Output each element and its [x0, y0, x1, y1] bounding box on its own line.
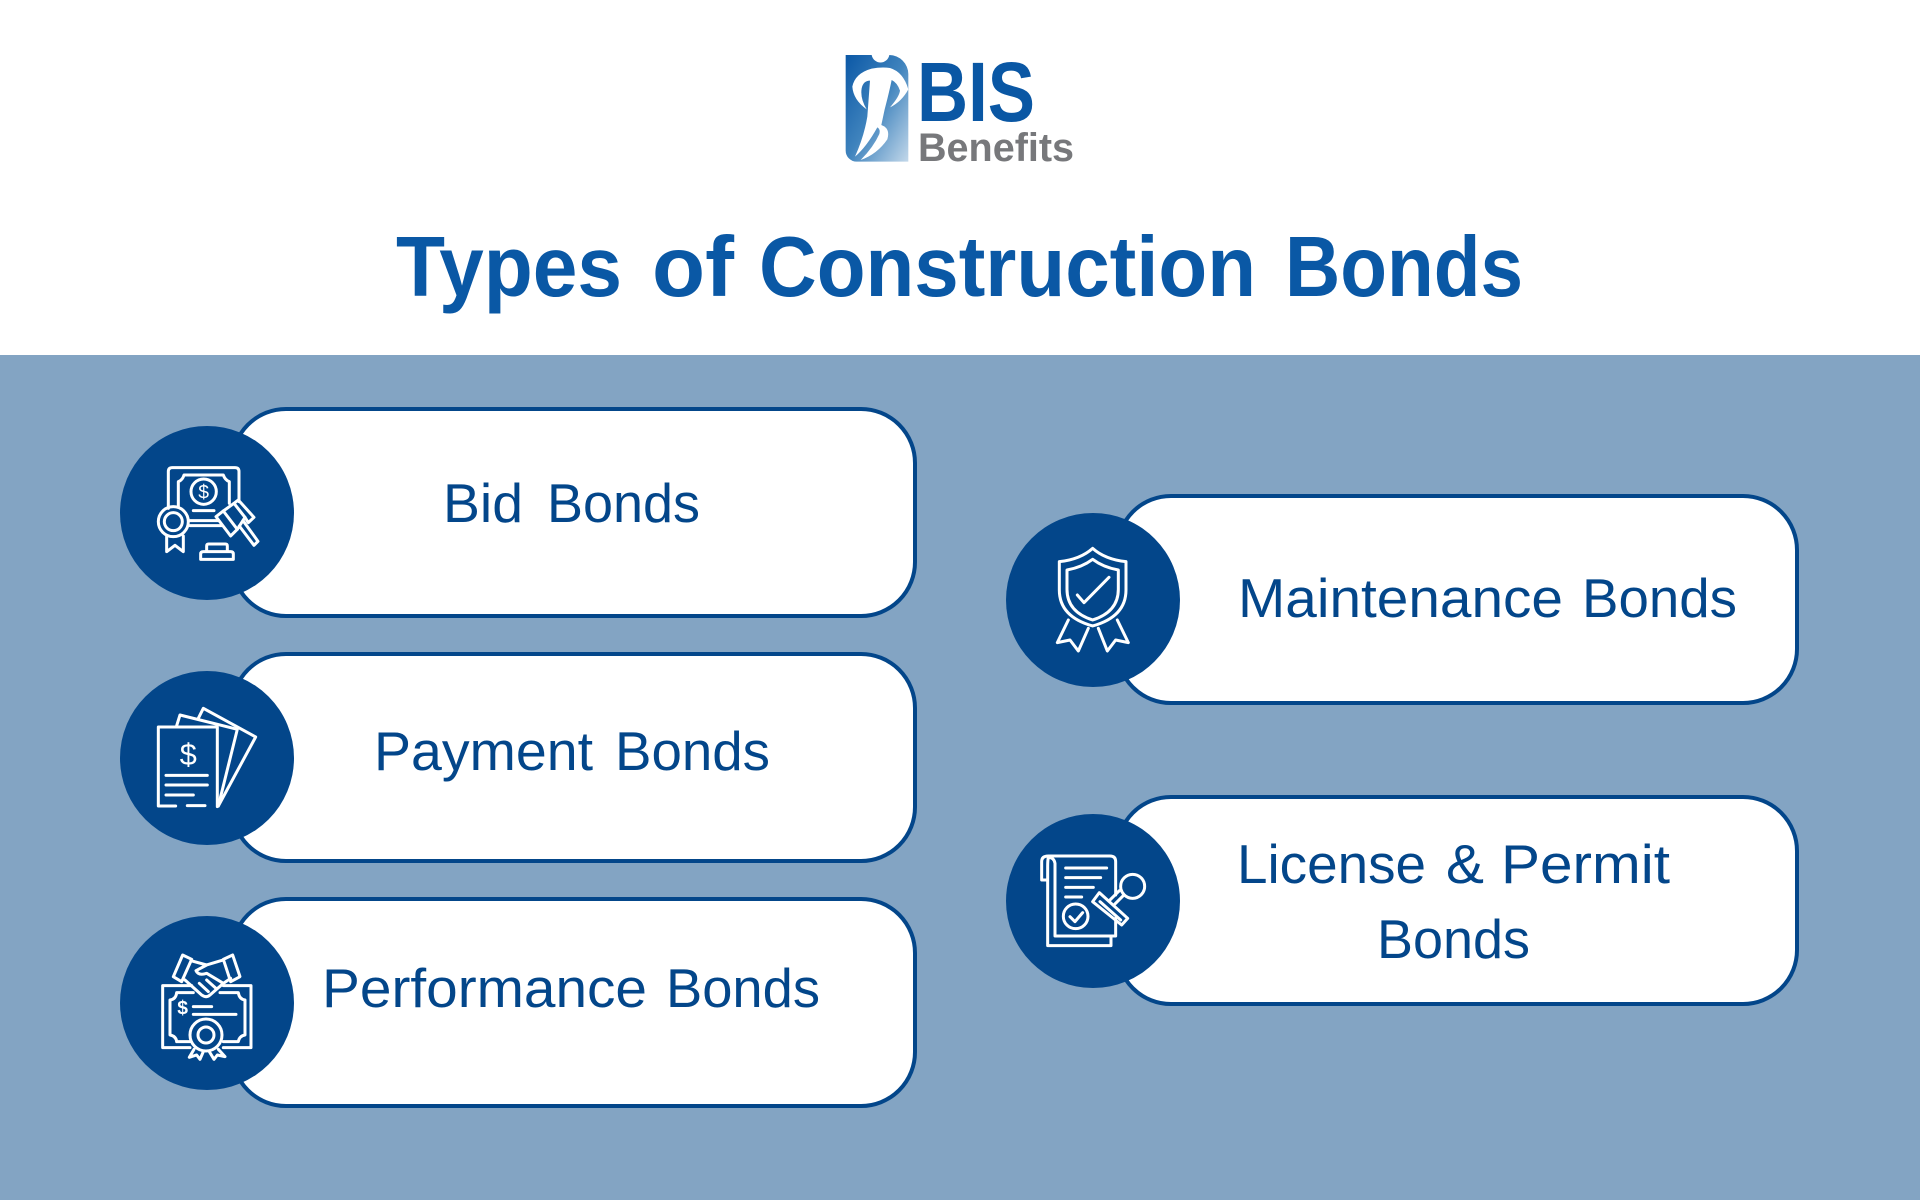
pill — [232, 409, 915, 616]
pill — [1117, 797, 1797, 1004]
label line 1 — [1237, 833, 1670, 895]
icon: shield with check and ribbons — [1057, 548, 1128, 651]
icon: certificate and gavel — [158, 468, 258, 559]
title: Bonds — [1285, 220, 1523, 315]
label: Bid — [443, 472, 523, 534]
title: Types — [396, 220, 622, 315]
icon: certificate and gavel: $ — [198, 483, 209, 504]
card: Payment Bonds — [120, 654, 915, 861]
label — [374, 720, 770, 782]
title: Construction — [759, 220, 1256, 315]
icon circle — [1006, 513, 1180, 687]
label: Payment — [374, 720, 593, 782]
card: Performance Bonds — [120, 899, 915, 1106]
label: Performance — [322, 957, 647, 1019]
card: Maintenance Bonds — [1006, 496, 1797, 703]
label — [1238, 567, 1737, 629]
blue background band — [0, 355, 1920, 1200]
label line 1: License — [1237, 833, 1426, 895]
label line 2: Bonds — [1377, 908, 1530, 970]
label — [322, 957, 820, 1019]
label: Bonds — [666, 957, 820, 1019]
label: Bonds — [615, 720, 770, 782]
label — [443, 472, 700, 534]
logo wordmark BIS: BIS — [917, 45, 1035, 139]
label: Maintenance — [1238, 567, 1563, 629]
card: Bid Bonds — [120, 409, 915, 616]
title: of — [652, 220, 735, 315]
label line 1: & — [1446, 833, 1484, 895]
icon: stack of payment documents: $ — [180, 738, 197, 772]
pill — [1117, 496, 1797, 703]
logo shield with runner — [846, 55, 908, 162]
icon: stack of payment documents — [158, 708, 256, 807]
icon circle — [120, 671, 294, 845]
card: License & Permit Bonds — [1006, 797, 1797, 1004]
pill — [232, 654, 915, 861]
icon: handshake over certificate — [163, 955, 251, 1059]
logo: BIS Benefits — [846, 45, 1074, 170]
title — [396, 220, 1523, 315]
icon: document with stamp — [1042, 856, 1145, 946]
icon circle — [120, 916, 294, 1090]
icon circle — [120, 426, 294, 600]
label line 1: Permit — [1501, 833, 1670, 895]
icon circle — [1006, 814, 1180, 988]
label: Bonds — [1582, 567, 1737, 629]
label: Bonds — [547, 472, 700, 534]
logo wordmark Benefits: Benefits — [918, 126, 1074, 170]
icon: handshake over certificate: $ — [177, 998, 188, 1019]
pill — [232, 899, 915, 1106]
